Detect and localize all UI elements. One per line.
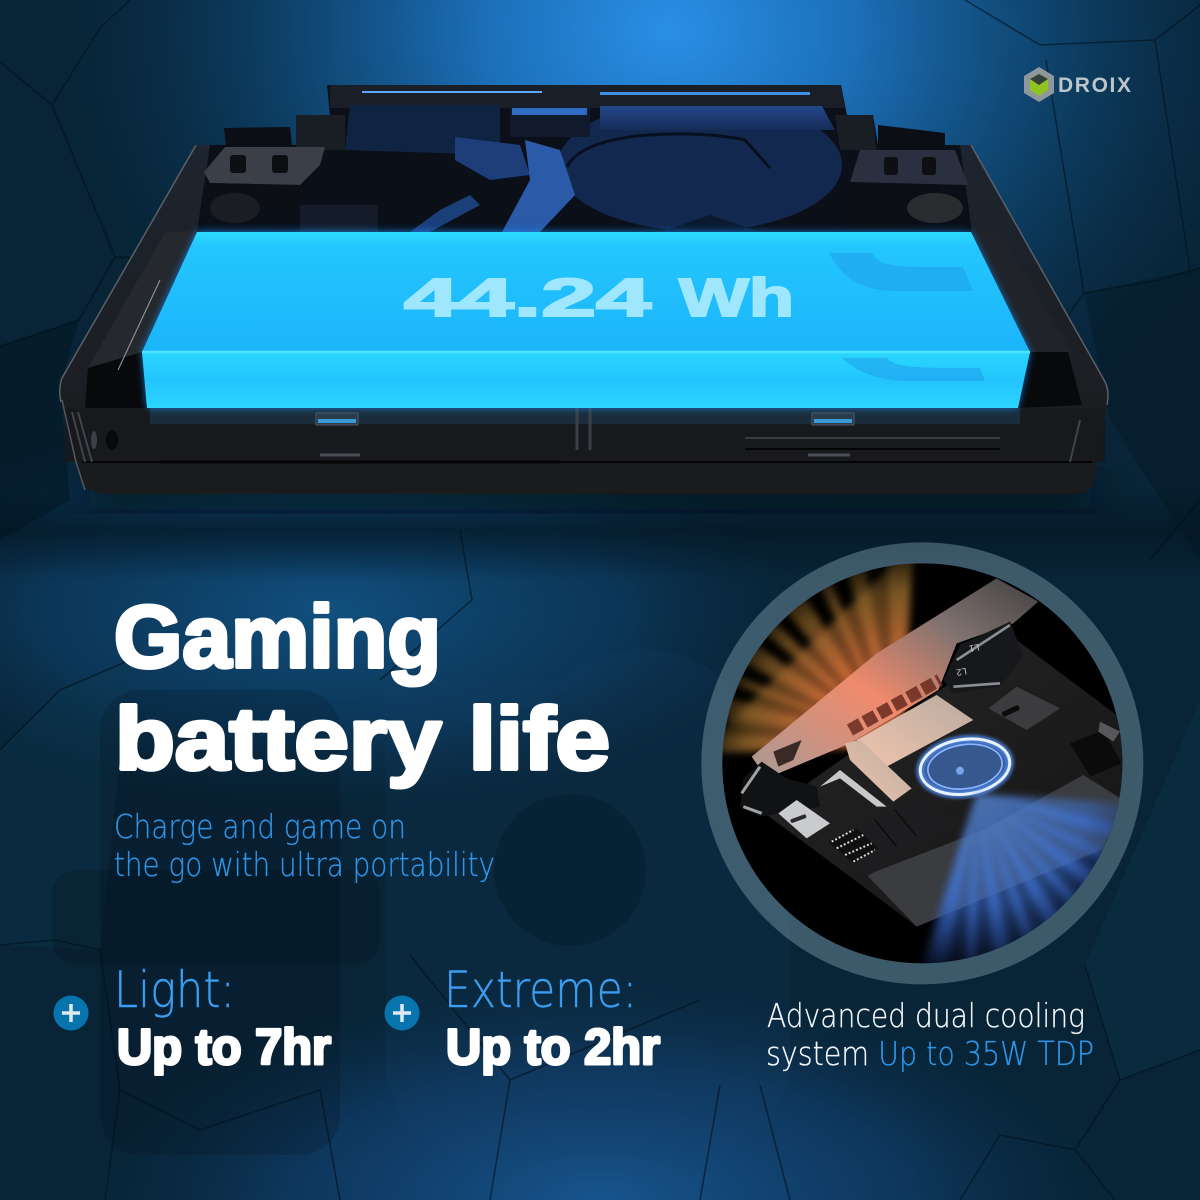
fan [917, 733, 1013, 800]
device underside [765, 640, 1123, 927]
ring [712, 553, 1133, 974]
icon: plus [54, 996, 88, 1030]
stat: extreme [384, 961, 660, 1075]
heading [114, 587, 610, 788]
device internals [197, 85, 972, 232]
L1 L2 shoulder buttons: L1 [968, 642, 980, 654]
device with battery [60, 85, 1108, 510]
air rays [921, 788, 1118, 964]
stat: light: Light: [114, 961, 235, 1019]
subheading [114, 807, 495, 884]
capacity label: 44.24 [404, 268, 651, 328]
device shell [60, 145, 1108, 494]
left hinge bracket [204, 127, 325, 223]
cooling illustration [722, 564, 1122, 964]
SSD [828, 810, 917, 876]
right hinge bracket [850, 125, 968, 228]
icon: logo hexagon [1024, 67, 1054, 102]
cooling caption: system Up to 35W TDP [766, 1034, 1094, 1073]
battery glow [142, 231, 1030, 408]
stat: extreme: Extreme: [444, 961, 637, 1019]
cooling caption [766, 996, 1094, 1073]
cooling caption: Advanced dual cooling [767, 996, 1085, 1035]
logo [1024, 67, 1131, 102]
subheading: Charge and game on [114, 807, 406, 846]
subheading: the go with ultra portability [114, 845, 495, 884]
heading: Gaming [114, 587, 441, 686]
icon: plus [384, 996, 420, 1030]
battery block [142, 232, 1030, 408]
device side edge [752, 578, 1038, 778]
right bracket [988, 687, 1122, 777]
logo wordmark: DROIX [1058, 74, 1131, 97]
L1 L2 shoulder buttons: L2 [956, 666, 968, 678]
heading: battery life [115, 689, 610, 788]
heat pipe [857, 695, 973, 767]
capacity label [404, 268, 794, 328]
cooling circle [697, 544, 1159, 980]
L1 L2 shoulder buttons [943, 622, 1023, 693]
device shadow [90, 470, 1090, 510]
translucent panel [867, 775, 1123, 927]
heat rays [722, 564, 916, 757]
stat: extreme: Up to 2hr [446, 1019, 660, 1075]
stat: light: Up to 7hr [117, 1019, 331, 1075]
left grip [740, 762, 830, 838]
stat: light [54, 961, 331, 1075]
capacity label: Wh [679, 268, 794, 328]
